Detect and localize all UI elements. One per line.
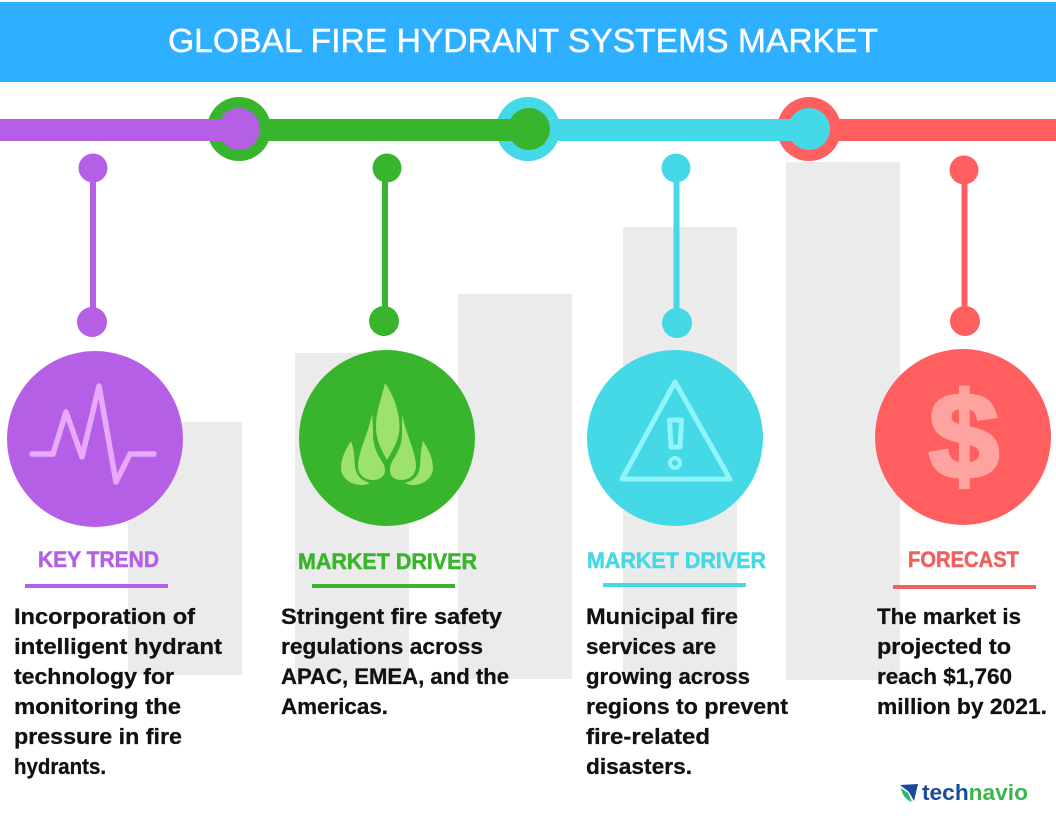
column: key trend: KEY TREND [38, 547, 159, 572]
column: forecast: million by 2021. [877, 694, 1047, 719]
timeline [0, 97, 1056, 161]
title banner: GLOBAL FIRE HYDRANT SYSTEMS MARKET [168, 22, 878, 59]
column: key trend: Incorporation of [14, 604, 196, 629]
column: key trend: intelligent hydrant [14, 634, 223, 659]
icon: warning triangle [587, 350, 763, 526]
icon: dollar [875, 349, 1051, 525]
title banner [0, 2, 1056, 82]
column: market driver services: disasters. [586, 754, 692, 779]
column: key trend: pressure in fire [14, 724, 182, 749]
column: forecast: projected to [877, 634, 1011, 659]
column: forecast [877, 547, 1047, 719]
column: market driver regulations: APAC, EMEA, and the [281, 664, 509, 689]
pin: forecast [950, 156, 980, 336]
column: market driver regulations [281, 549, 509, 719]
column: forecast: reach $1,760 [877, 664, 1012, 689]
column: market driver services: MARKET DRIVER [587, 548, 766, 573]
column: forecast: FORECAST [908, 547, 1020, 572]
column: key trend: hydrants. [14, 754, 106, 779]
column: market driver regulations: Americas. [281, 694, 388, 719]
icon: flames [299, 350, 475, 526]
column: market driver services: growing across [586, 664, 750, 689]
pin: market driver cyan [662, 154, 692, 338]
column: market driver services: fire-related [586, 724, 710, 749]
background bars [128, 162, 900, 680]
pin: market driver green [369, 154, 402, 336]
column: market driver services: services are [586, 634, 716, 659]
column: key trend [14, 547, 223, 779]
icon: dollar: $ [929, 368, 999, 504]
column: market driver regulations: Stringent fire safety [281, 604, 502, 629]
column: forecast: The market is [877, 604, 1021, 629]
column: key trend: technology for [14, 664, 174, 689]
column: market driver regulations: regulations across [281, 634, 483, 659]
icon: pulse [7, 351, 183, 527]
column: key trend: monitoring the [14, 694, 181, 719]
column: market driver regulations: MARKET DRIVER [298, 549, 477, 574]
pin: key trend [77, 154, 108, 337]
column: market driver services: regions to prevent [586, 694, 789, 719]
column: market driver services [586, 548, 789, 779]
column: market driver services: Municipal fire [586, 604, 738, 629]
logo: technavio: technavio [922, 780, 1028, 805]
